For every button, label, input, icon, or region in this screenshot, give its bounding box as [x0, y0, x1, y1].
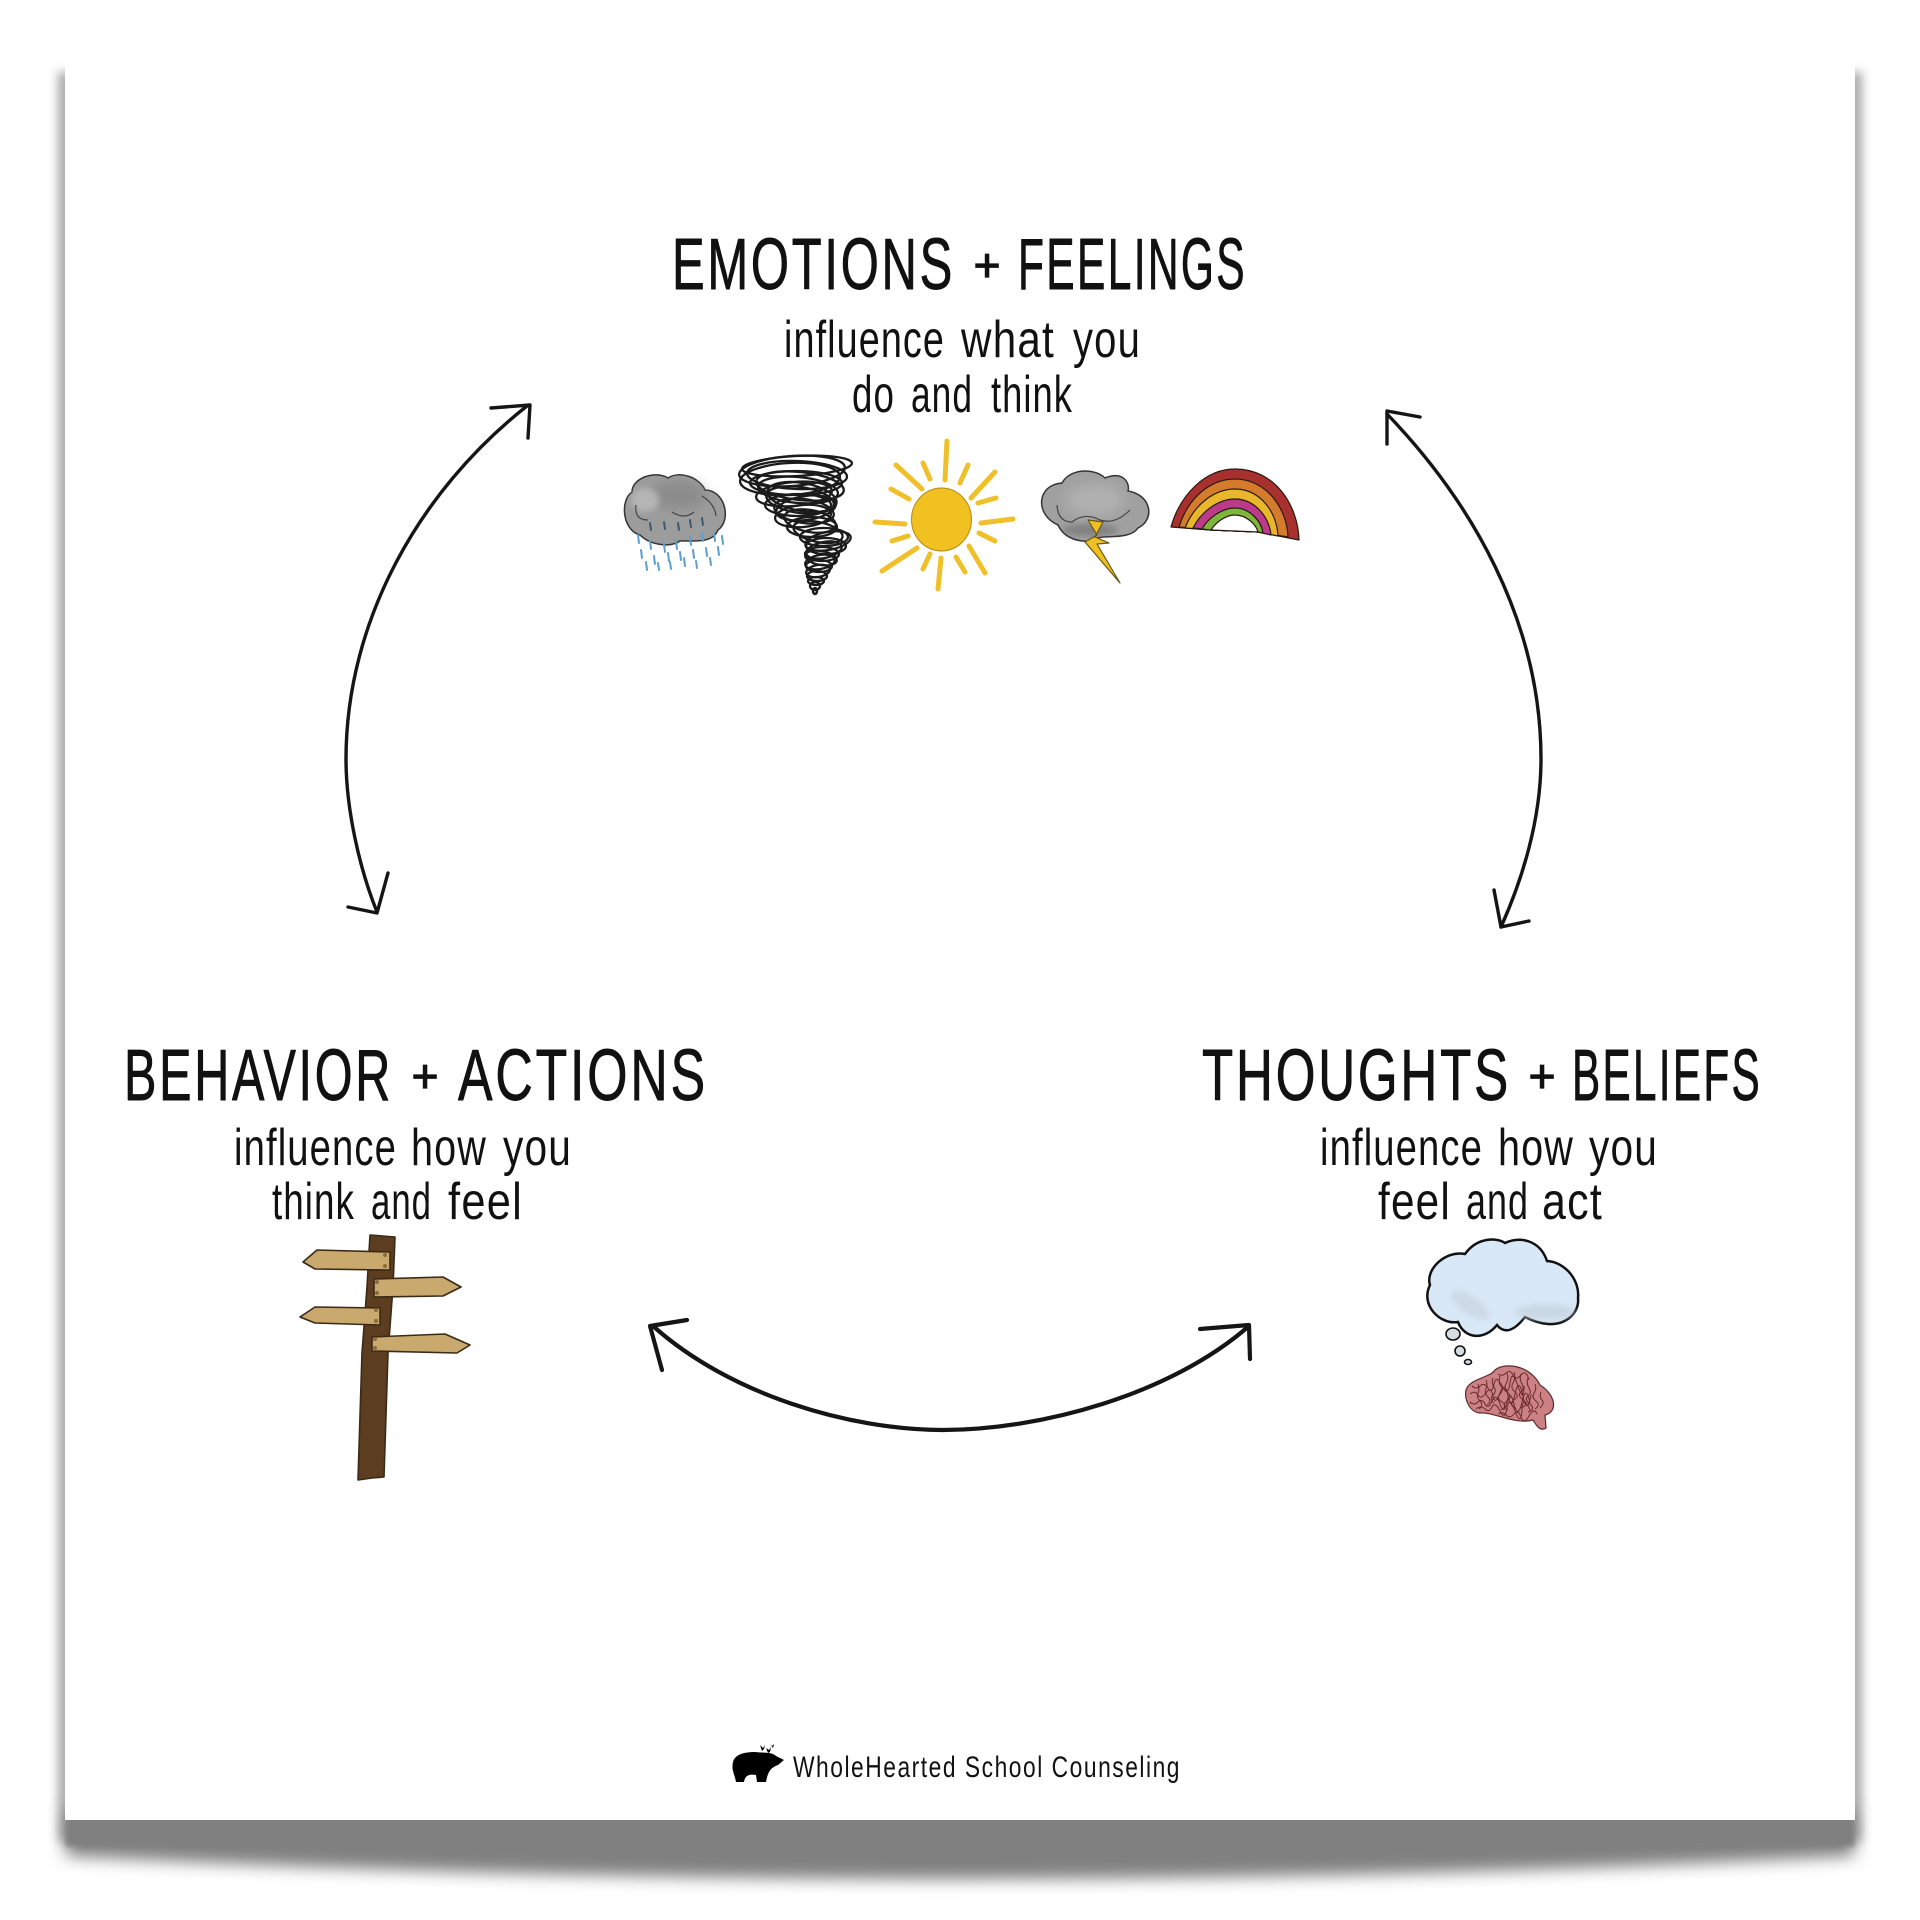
text: influence what you do and think: think — [991, 366, 1073, 424]
text: influence how you feel and act: act — [1542, 1173, 1603, 1231]
text: influence what you do and think: you — [1073, 311, 1141, 369]
text: influence how you think and feel: think — [272, 1173, 355, 1231]
heading: behavior and actions: BEHAVIOR — [124, 1036, 393, 1116]
icon: wooden signpost — [300, 1235, 470, 1480]
heading: emotions and feelings: + — [974, 239, 1000, 291]
text: WholeHearted School Counseling: WholeHearted School Counseling — [793, 1751, 1181, 1784]
text: influence how you think and feel: feel — [448, 1173, 523, 1231]
text: influence how you think and feel: how — [411, 1119, 487, 1177]
heading: thoughts and beliefs: + — [1529, 1050, 1555, 1102]
panel: emotions and feelings — [624, 225, 1299, 594]
panel: thoughts and beliefs — [1202, 1036, 1762, 1429]
text: influence how you feel and act: influence — [1320, 1119, 1483, 1177]
heading: behavior and actions: + — [412, 1050, 438, 1102]
text: influence what you do and think — [784, 311, 1141, 424]
icon: bear with butterflies — [732, 1744, 784, 1782]
icon: thought bubble — [1427, 1240, 1578, 1364]
text: influence how you feel and act: feel — [1378, 1173, 1451, 1231]
panel: behavior and actions — [124, 1036, 708, 1480]
text: influence how you feel and act — [1320, 1119, 1658, 1231]
arrow: thoughts to behavior (double headed) — [650, 1320, 1250, 1430]
text: influence what you do and think: do — [852, 366, 895, 424]
icon: tornado — [738, 452, 852, 594]
icon: rain cloud — [624, 475, 725, 570]
icon: storm cloud with lightning — [1042, 471, 1149, 583]
text: influence how you feel and act: and — [1466, 1173, 1529, 1231]
heading: emotions and feelings: EMOTIONS — [672, 225, 955, 305]
text: influence how you feel and act: you — [1589, 1119, 1658, 1177]
text: influence how you think and feel: you — [503, 1119, 572, 1177]
heading: behavior and actions: ACTIONS — [458, 1036, 708, 1116]
footer: logo and brand — [732, 1744, 1181, 1784]
heading: thoughts and beliefs: BELIEFS — [1572, 1036, 1762, 1116]
text: influence how you think and feel — [234, 1119, 572, 1231]
arrow: behavior to emotions (double headed) — [346, 405, 530, 913]
heading: emotions and feelings: FEELINGS — [1018, 225, 1247, 305]
text: influence how you think and feel: and — [371, 1173, 432, 1231]
text: influence what you do and think: and — [911, 366, 973, 424]
text: influence what you do and think: what — [960, 311, 1055, 369]
icon: brain — [1466, 1366, 1554, 1429]
icon: rainbow — [1171, 469, 1299, 545]
text: influence how you feel and act: how — [1498, 1119, 1574, 1177]
text: influence what you do and think: influence — [784, 311, 945, 369]
icon: sun — [875, 441, 1013, 589]
heading: behavior and actions — [124, 1036, 708, 1116]
heading: thoughts and beliefs: THOUGHTS — [1202, 1036, 1511, 1116]
arrow: emotions to thoughts (double headed) — [1387, 411, 1541, 927]
text: influence how you think and feel: influence — [234, 1119, 397, 1177]
